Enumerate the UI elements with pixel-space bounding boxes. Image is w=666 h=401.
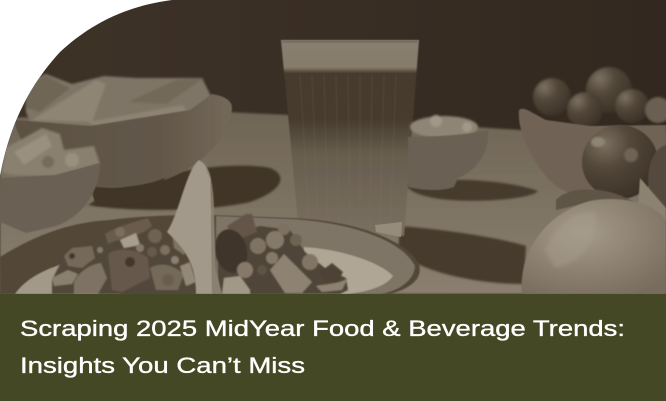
pepper (227, 214, 257, 238)
dark slice (215, 228, 247, 272)
taco shell (167, 160, 222, 294)
bowl of oranges back right (519, 67, 666, 193)
table shadow: left (88, 166, 280, 210)
right tortilla (300, 247, 393, 294)
taco filling right (211, 214, 348, 294)
title text: Insights You Can’t Miss (20, 353, 305, 378)
ribs (300, 75, 396, 234)
table surface (0, 112, 666, 294)
small bowl centre (408, 115, 488, 190)
orange right edge (648, 145, 666, 208)
large glass (281, 40, 419, 237)
large orange front (522, 199, 666, 294)
bowl body (0, 163, 100, 233)
loose orange (582, 125, 658, 199)
small bowl left (0, 128, 100, 233)
white cube (120, 233, 140, 248)
chips (26, 74, 212, 128)
photo: table scene (0, 0, 666, 294)
title text: Scraping 2025 MidYear Food & Beverage Trends: (20, 316, 625, 341)
title text (20, 316, 625, 378)
orange slice (556, 178, 666, 221)
bowl of chips (14, 74, 232, 206)
food in small bowl (2, 128, 100, 176)
bowl body (519, 109, 666, 193)
taco filling left (52, 218, 196, 294)
table shadow: lower right (398, 226, 526, 284)
left tortilla (15, 262, 120, 294)
dark background wall (0, 0, 666, 294)
red pepper strip (105, 218, 152, 244)
bowl body (14, 94, 232, 187)
table shadow: centre bowl (405, 180, 538, 201)
title panel (0, 294, 666, 401)
fruit (533, 78, 571, 116)
plate (0, 215, 420, 294)
